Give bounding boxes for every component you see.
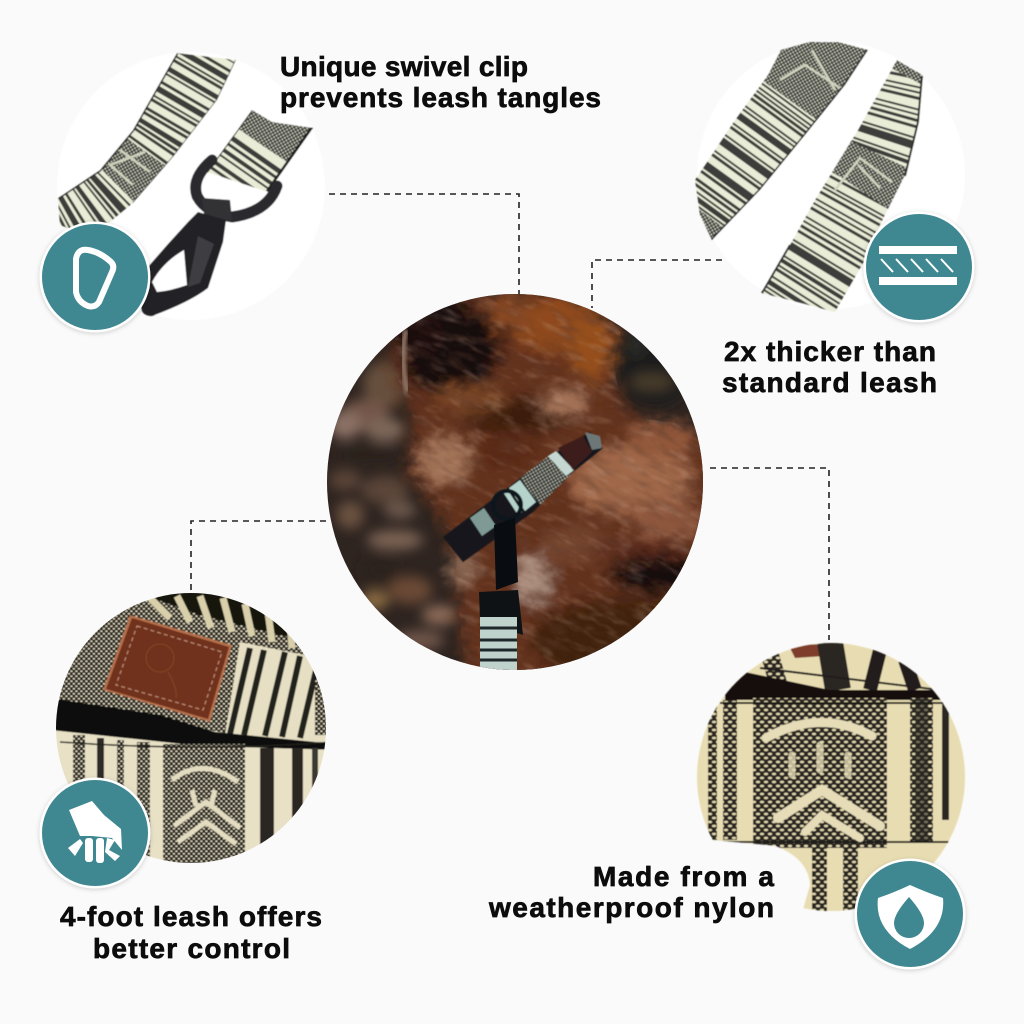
strap with clip ring: [207, 110, 314, 192]
lower strap: [56, 730, 326, 863]
connector: thickness to dog: [592, 260, 722, 308]
panel: dog photo: [327, 294, 703, 670]
heading: thickness: standard leash: [722, 367, 937, 398]
heading: material: weatherproof nylon: [488, 892, 774, 923]
heading: material: [488, 861, 774, 923]
black band: [50, 698, 335, 750]
vertical woven stripes: [708, 698, 960, 848]
chevron motif: [172, 768, 240, 844]
leash strap: [58, 52, 236, 228]
leash clip and lead: [479, 518, 523, 677]
dog ear edge: [403, 330, 407, 392]
connector: control to dog: [191, 521, 326, 590]
connector: nylon to dog: [710, 468, 829, 640]
black swivel clip: [141, 160, 277, 316]
icon: water shield: [854, 858, 966, 970]
heading: material: Made from a: [593, 861, 774, 892]
heading: control: better control: [93, 933, 290, 964]
fur texture: [394, 294, 700, 670]
heading: thickness: [722, 336, 937, 398]
left strap: [694, 41, 868, 240]
blurred forest background: [329, 323, 693, 650]
upper strap: [59, 593, 326, 740]
text cut-out: [690, 838, 810, 913]
dog fur: [387, 290, 720, 690]
chevron motif: [766, 722, 880, 838]
lower strap: [811, 847, 859, 912]
heading: control: 4-foot leash offers: [60, 901, 322, 932]
icon: layered thickness: [864, 212, 974, 322]
heading: swivel clip: [280, 51, 601, 113]
heading: thickness: 2x thicker than: [724, 336, 936, 367]
icon: gripping hand: [40, 778, 150, 888]
panel: thickness photo: [694, 41, 924, 312]
leather patch: [103, 615, 232, 722]
icon: carabiner: [40, 222, 150, 332]
panel: nylon photo: [690, 640, 975, 915]
panel: swivel clip photo: [58, 52, 314, 317]
connector: swivel clip to dog: [329, 194, 519, 295]
right strap: [762, 60, 922, 312]
harness collar: [443, 432, 603, 562]
top strap: [725, 642, 945, 700]
heading: control: [60, 901, 322, 964]
heading: swivel clip: prevents leash tangles: [280, 82, 601, 113]
heading: swivel clip: Unique swivel clip: [280, 51, 528, 82]
panel: control photo: [56, 593, 326, 863]
